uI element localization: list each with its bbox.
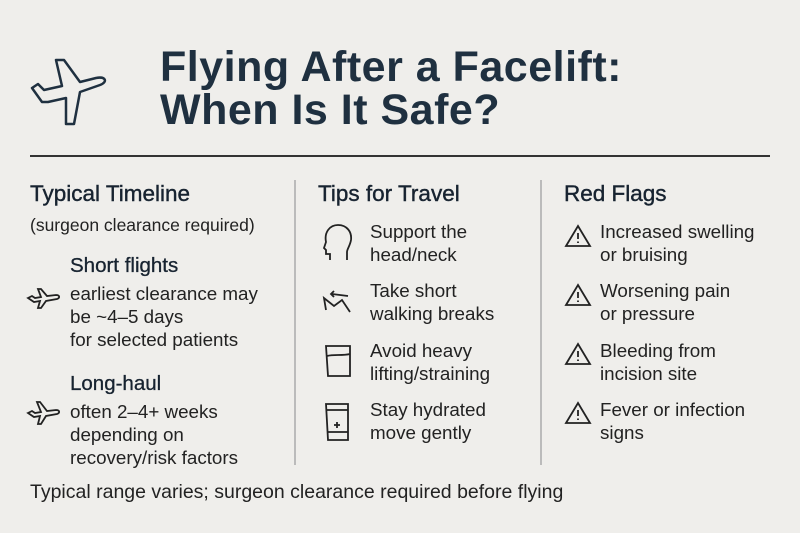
long haul [70, 372, 238, 468]
heading timeline: Typical Timeline [30, 181, 190, 206]
long haul: often 2–4+ weeks [70, 401, 218, 422]
panel: tips: Avoid heavy [370, 340, 472, 361]
title: When Is It Safe? [160, 86, 500, 134]
panel: tips: move gently [370, 422, 471, 443]
panel: red flags: or bruising [600, 244, 688, 265]
panel: red flags: Increased swelling [600, 221, 755, 242]
long haul: depending on [70, 424, 184, 445]
short flights: be ~4–5 days [70, 306, 183, 327]
panel: red flags: Worsening pain [600, 280, 730, 301]
heading tips: Tips for Travel [318, 181, 460, 206]
panel: tips: Support the [370, 221, 467, 242]
panel: tips: walking breaks [370, 303, 494, 324]
icon: cup [325, 403, 349, 441]
panel: red flags: or pressure [600, 303, 695, 324]
panel: timeline [26, 181, 258, 468]
short flights: earliest clearance may [70, 283, 258, 304]
panel: tips: lifting/straining [370, 363, 490, 384]
panel: tips: head/neck [370, 244, 457, 265]
panel: red flags: signs [600, 422, 644, 443]
title: Flying After a Facelift: [160, 43, 622, 91]
panel: red flags: Fever or infection [600, 399, 745, 420]
short flights [70, 254, 258, 350]
icon: walking [322, 290, 351, 312]
panel: tips: Take short [370, 280, 457, 301]
icon: plane short [26, 288, 60, 309]
warnings [564, 224, 592, 247]
panel: red flags: incision site [600, 363, 697, 384]
icon: airplane [30, 58, 106, 126]
icon: glass [325, 345, 351, 377]
long haul: Long-haul [70, 372, 161, 395]
panel: red flags: Bleeding from [600, 340, 716, 361]
long haul: recovery/risk factors [70, 447, 238, 468]
heading red flags: Red Flags [564, 181, 667, 206]
icon: head [323, 224, 352, 260]
panel: tips: Stay hydrated [370, 399, 486, 420]
panel: tips [318, 181, 494, 443]
footer note: Typical range varies; surgeon clearance required before flying [30, 481, 563, 503]
title [160, 43, 622, 134]
subheading: (surgeon clearance required) [30, 215, 255, 235]
icon: plane long [26, 401, 60, 425]
panel: red flags [564, 181, 755, 443]
short flights: Short flights [70, 254, 178, 277]
short flights: for selected patients [70, 329, 238, 350]
